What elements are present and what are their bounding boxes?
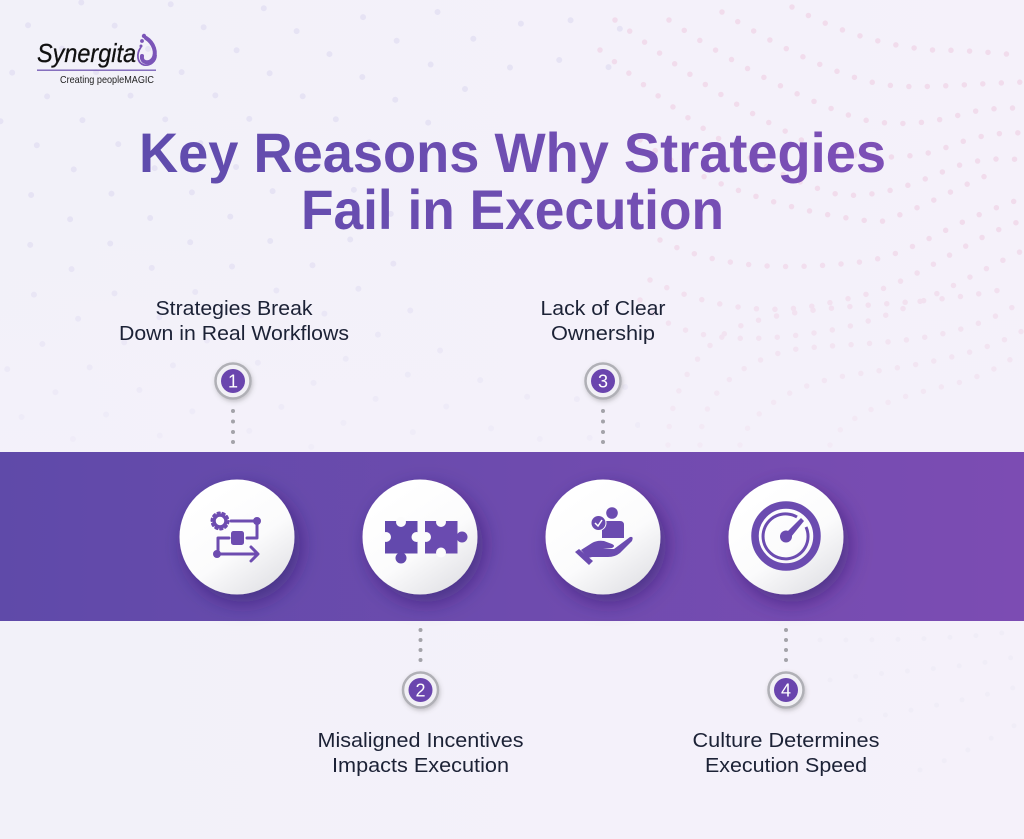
step 4 disc with gauge icon [728,480,844,594]
icon: person on open hand [575,507,633,565]
step 2 connector [418,628,422,662]
step 4 badge [768,672,804,708]
logo: Synergita: Synergita [37,38,136,68]
step 4 badge: 4 [781,680,791,700]
logo: Synergita: Creating peopleMAGIC [60,74,154,86]
background dot fade [0,230,1024,452]
step 3 disc with ownership icon [546,480,660,594]
background dot pattern: lavender [0,0,623,360]
logo: Synergita [37,34,156,86]
step 3 badge [586,364,620,398]
step 2 label [318,730,524,777]
lower right faint dots [820,630,1024,770]
icon: puzzle pieces [381,517,468,564]
step 4 connector [784,628,788,662]
step 3 connector [601,409,605,444]
step 1 label: Strategies Break [156,298,314,320]
step 1 label: Down in Real Workflows [119,323,349,345]
icon: speed gauge [755,505,817,567]
step 4 label [692,730,880,777]
step 1 badge: 1 [228,372,238,392]
step 3 label: Lack of Clear [540,298,666,320]
step 3 badge: 3 [598,372,608,392]
step 4 label: Culture Determines [692,730,880,752]
icon: workflow gear and arrow [212,512,260,561]
step 1 connector [231,409,235,444]
background dot pattern: pink [600,7,1024,445]
step 2 disc with puzzle icon [362,480,478,594]
step 3 label [540,298,666,345]
title [139,121,886,241]
step 3 label: Ownership [551,323,655,345]
central purple band [0,452,1024,621]
step 1 badge [216,364,250,398]
step 2 label: Misaligned Incentives [318,730,524,752]
step 4 label: Execution Speed [705,755,867,777]
step 2 badge: 2 [415,680,426,700]
step 1 label [119,298,349,345]
title: Fail in Execution [301,178,724,241]
step 2 label: Impacts Execution [332,755,509,777]
logo swirl icon [138,34,156,65]
title: Key Reasons Why Strategies [139,121,886,184]
step 2 badge [403,672,438,708]
step 1 disc with workflow icon [180,480,294,594]
